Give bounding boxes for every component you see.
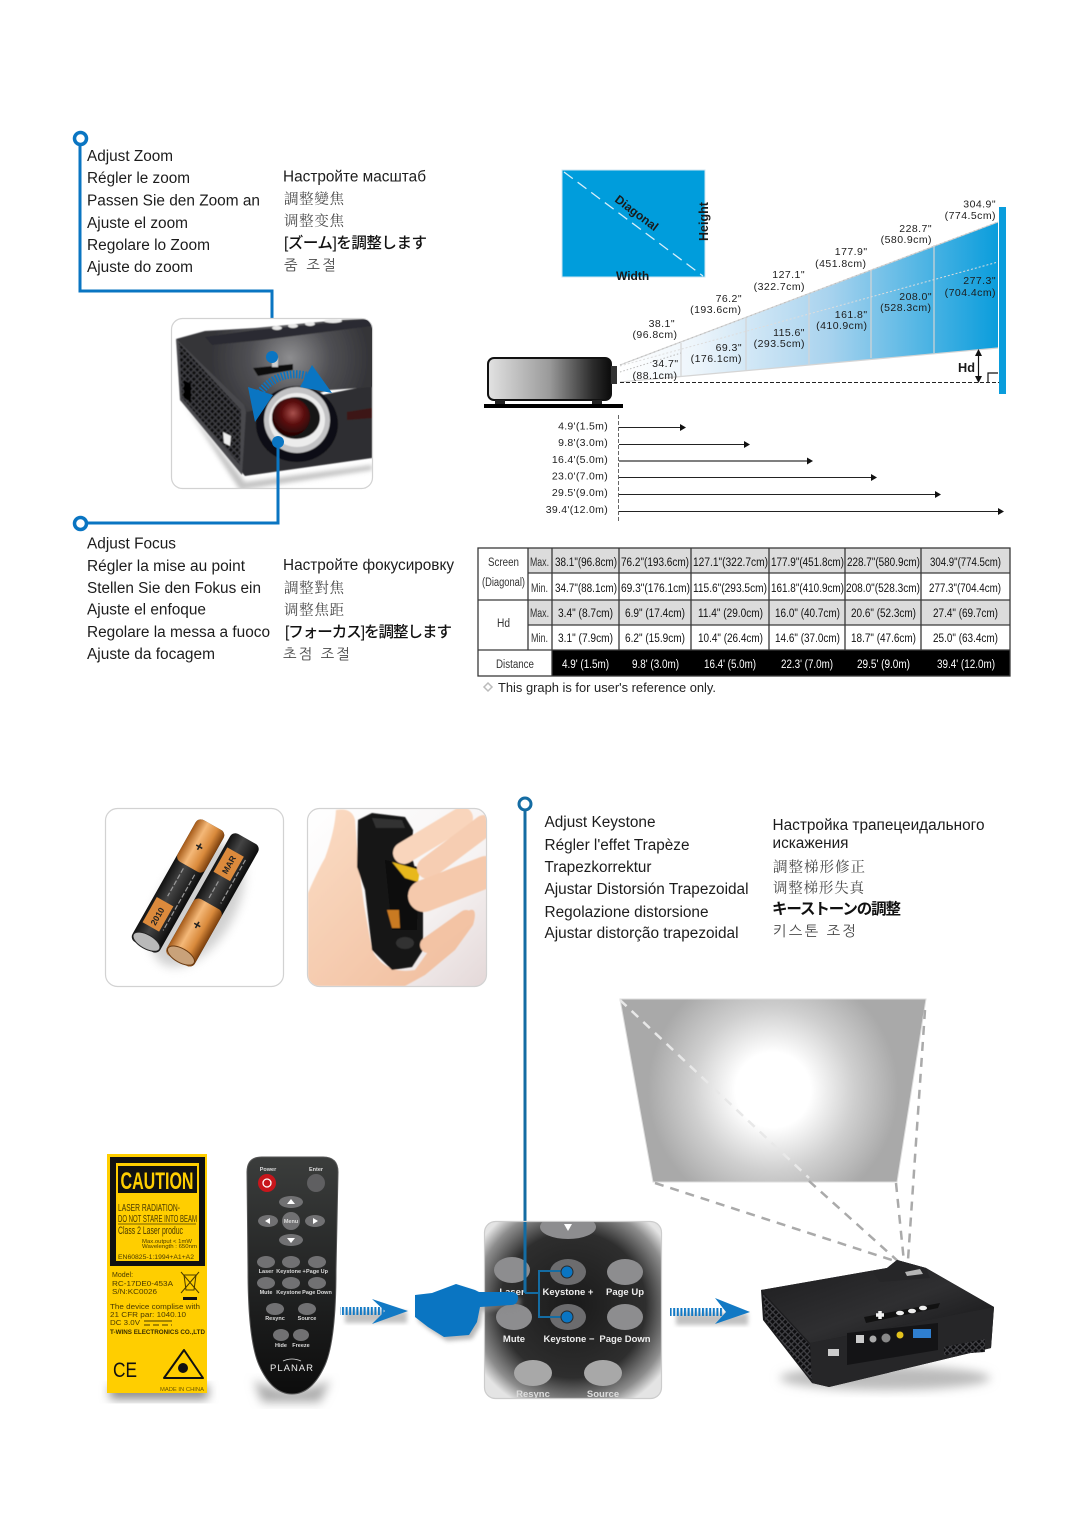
photo: remote control: Resync (265, 1316, 285, 1322)
icon: projector side view (484, 358, 623, 408)
table: projection specifications: Max. (530, 608, 549, 620)
connector: adjust focus (74, 351, 284, 530)
table: projection specifications: 10.4" (26.4cm) (698, 633, 763, 645)
label: caution sticker: S/N:KC0026 (112, 1289, 157, 1296)
table: projection specifications: Max. (530, 557, 549, 569)
labels: beam diagonal sizes: (293.5cm) (754, 338, 805, 350)
battery: back: MAR (220, 854, 238, 876)
labels: beam diagonal sizes: (704.4cm) (945, 287, 996, 299)
text block: adjust focus languages: Ajuste el enfoque (87, 602, 206, 618)
table: projection specifications: 38.1"(96.8cm) (555, 557, 617, 569)
table: projection specifications: (Diagonal) (482, 577, 525, 589)
text block: adjust focus languages: Ajuste da focagem (87, 646, 215, 663)
text block: adjust zoom languages: Adjust Zoom (87, 148, 173, 165)
labels: beam diagonal sizes: 228.7" (899, 223, 932, 235)
photo: remote control (247, 1157, 338, 1402)
table: projection specifications: 3.4" (8.7cm) (558, 608, 613, 620)
label: caution sticker: 21 CFR par: 1040.10 (110, 1312, 186, 1319)
diagram: screen dimensions: Height (697, 201, 711, 241)
labels: beam diagonal sizes: (451.8cm) (815, 258, 866, 270)
icon: rotation arrows (248, 365, 332, 422)
text block: adjust keystone languages: 키스톤 조정 (773, 924, 856, 939)
diagram: screen dimensions: Width (616, 269, 649, 283)
keystone button callout (525, 1222, 573, 1323)
labels: beam diagonal sizes: (88.1cm) (632, 370, 678, 382)
photo: remote control: PLANAR (270, 1363, 314, 1374)
screen bar (999, 207, 1006, 394)
Hd marker: Hd (958, 360, 975, 375)
table: projection specifications: 277.3"(704.4cm) (929, 583, 1001, 595)
table: projection specifications: 39.4' (12.0m) (937, 659, 995, 671)
table: projection specifications: 9.8' (3.0m) (632, 659, 679, 671)
photo: keypad close-up (484, 1215, 662, 1400)
labels: beam diagonal sizes: (580.9cm) (881, 234, 932, 246)
text block: adjust keystone languages: Ajustar Distorsión Trapezoidal (544, 881, 748, 898)
photo: remote control: Laser (259, 1269, 274, 1275)
table: projection specifications: Hd (497, 618, 510, 630)
photo: remote control: Enter (309, 1167, 324, 1173)
label: caution sticker: MADE IN CHINA (160, 1387, 204, 1393)
labels: beam diagonal sizes: (774.5cm) (945, 210, 996, 222)
table: projection specifications: 16.4' (5.0m) (704, 659, 756, 671)
photo: remote control: Page Up (306, 1269, 329, 1275)
chart: throw distance arrows: 39.4'(12.0m) (546, 504, 608, 516)
label: caution sticker: DC 3.0V (110, 1320, 140, 1327)
table: projection specifications: 25.0" (63.4cm) (933, 633, 998, 645)
text block: adjust zoom languages: 줌 조절 (284, 257, 336, 273)
label: caution sticker: CAUTION (120, 1168, 194, 1195)
text block: adjust zoom languages: 調整變焦 (284, 188, 344, 209)
table: projection specifications: 34.7"(88.1cm) (555, 583, 617, 595)
label: caution sticker: Wavelength : 650nm (142, 1244, 197, 1250)
labels: beam diagonal sizes: 177.9" (835, 246, 868, 258)
photo: keypad close-up: Keystone − (544, 1334, 595, 1345)
table: projection specifications: 127.1"(322.7cm) (693, 557, 768, 569)
table: projection specifications: 27.4" (69.7cm) (933, 608, 998, 620)
labels: beam diagonal sizes: 38.1" (649, 318, 675, 330)
chart: throw distance arrows: 16.4'(5.0m) (552, 454, 608, 466)
text block: adjust zoom languages: Passen Sie den Zoom an (87, 192, 260, 210)
diagram: projection beam (620, 222, 998, 382)
text block: adjust focus languages: Stellen Sie den Fokus ein (87, 580, 261, 597)
arrow: remote to keypad (340, 1299, 408, 1324)
table: projection specifications: 208.0"(528.3cm) (846, 583, 920, 595)
icon: pointing hand (415, 1284, 521, 1341)
icon: laser warning (164, 1350, 203, 1378)
table: projection specifications: 228.7"(580.9cm) (847, 557, 920, 569)
photo: remote control: Hide (275, 1343, 287, 1349)
photo: projector rear view (761, 1260, 994, 1390)
labels: beam diagonal sizes: (322.7cm) (754, 281, 805, 293)
battery: front: + (192, 837, 207, 855)
photo: remote control: Source (298, 1316, 316, 1322)
note: reference only: This graph is for user's reference only. (498, 681, 716, 695)
text block: adjust focus languages: Настройте фокусировку (283, 557, 454, 574)
table: projection specifications: 6.2" (15.9cm) (625, 633, 685, 645)
text block: adjust keystone languages: Régler l'effet Trapèze (544, 837, 690, 854)
arrow: keypad to projector (670, 1298, 750, 1325)
table: projection specifications: 161.8"(410.9cm) (771, 583, 844, 595)
table: projection specifications: 11.4" (29.0cm) (698, 608, 763, 620)
photo: batteries (106, 808, 284, 986)
labels: beam diagonal sizes: 69.3" (716, 342, 742, 354)
text block: adjust keystone languages: Adjust Keystone (544, 814, 656, 831)
labels: beam diagonal sizes: 127.1" (772, 269, 805, 281)
text block: adjust zoom languages: Régler le zoom (87, 170, 190, 187)
battery: front: 2010 (148, 905, 167, 927)
photo: keypad close-up: Resync (516, 1389, 550, 1400)
table: projection specifications (478, 548, 1010, 676)
table: projection specifications: Min. (531, 583, 548, 595)
battery: back: + (190, 916, 205, 934)
text block: adjust keystone languages: Regolazione distorsione (544, 904, 708, 921)
text block: adjust keystone languages: 調整梯形修正 (773, 856, 865, 877)
table: projection specifications: 22.3' (7.0m) (781, 659, 833, 671)
table: projection specifications: 20.6" (52.3cm) (851, 608, 916, 620)
photo: keypad close-up: Page Down (599, 1334, 651, 1345)
text block: adjust zoom languages: Ajuste do zoom (87, 259, 193, 276)
diagram: screen dimensions: Diagonal (612, 192, 661, 234)
labels: beam diagonal sizes: 277.3" (963, 275, 996, 287)
table: projection specifications: 76.2"(193.6cm) (621, 557, 689, 569)
text block: adjust keystone languages: 调整梯形失真 (773, 877, 864, 898)
labels: beam diagonal sizes (632, 198, 996, 382)
label: caution sticker: LASER RADIATION- (118, 1203, 180, 1214)
labels: beam diagonal sizes: 76.2" (716, 293, 742, 305)
labels: beam diagonal sizes: (193.6cm) (690, 304, 742, 316)
label: caution sticker: RC-17DE0-453A (112, 1281, 173, 1288)
photo: remote control: Freeze (292, 1343, 310, 1349)
icon: recycling bin (181, 1272, 199, 1300)
label: caution sticker: CE (113, 1359, 137, 1382)
text block: adjust keystone languages: Настройка трапецеидального (772, 817, 984, 834)
text block: adjust focus languages: 초점 조절 (283, 646, 350, 662)
chart: throw distance arrows: 4.9'(1.5m) (558, 420, 608, 432)
label: caution sticker: DO NOT STARE INTO BEAM (118, 1214, 197, 1225)
table: projection specifications: 177.9"(451.8cm) (771, 557, 844, 569)
table: projection specifications: 115.6"(293.5cm) (693, 583, 767, 595)
photo: keypad close-up: Mute (503, 1334, 525, 1345)
photo: keypad close-up: Page Up (606, 1287, 644, 1298)
text block: adjust focus languages: [フォーカス]を調整します (285, 623, 452, 641)
text block: adjust focus languages (87, 536, 454, 663)
table: projection specifications: 304.9"(774.5cm) (930, 557, 1001, 569)
photo: keypad close-up: Keystone + (543, 1287, 594, 1298)
diagram: keystone trapezoid screen (620, 999, 926, 1263)
label: caution sticker: T-WINS ELECTRONICS CO.,LTD (110, 1329, 205, 1336)
chart: throw distance arrows: 23.0'(7.0m) (552, 470, 608, 482)
table: projection specifications: 29.5' (9.0m) (857, 659, 910, 671)
connector: adjust zoom (74, 132, 272, 356)
photo: remote control: Keystone − (276, 1290, 306, 1296)
text block: adjust zoom languages: Ajuste el zoom (87, 215, 188, 232)
text block: adjust zoom languages (87, 148, 427, 276)
photo: inserting batteries in remote (308, 808, 486, 986)
table: projection specifications: Screen (488, 557, 519, 569)
text block: adjust keystone languages: искажения (772, 835, 848, 852)
table: projection specifications: 6.9" (17.4cm) (625, 608, 685, 620)
photo: remote control: Menu (284, 1219, 298, 1225)
battery: back (164, 831, 261, 970)
photo: projector lens close-up (172, 318, 373, 490)
labels: beam diagonal sizes: 304.9" (963, 198, 996, 210)
chart: throw distance arrows: 9.8'(3.0m) (558, 437, 608, 449)
labels: beam diagonal sizes: (176.1cm) (691, 353, 742, 365)
text block: adjust keystone languages: Trapezkorrektur (544, 859, 652, 876)
photo: keypad close-up: Source (587, 1389, 619, 1400)
label: caution sticker: EN60825-1:1994+A1+A2 (118, 1254, 194, 1261)
label: caution sticker: The device complise with (110, 1304, 200, 1311)
connector: adjust keystone (519, 798, 531, 1222)
chart: throw distance arrows (546, 415, 1004, 522)
photo: keypad close-up: Laser (499, 1287, 525, 1298)
diagram: screen dimensions (562, 170, 711, 283)
label: caution sticker: Max.output < 1mW (142, 1239, 193, 1245)
chart: throw distance arrows: 29.5'(9.0m) (552, 487, 608, 499)
text block: adjust keystone languages (544, 814, 984, 942)
text block: adjust keystone languages: キーストーンの調整 (772, 900, 901, 918)
photo: remote control: Mute (260, 1290, 272, 1296)
text block: adjust focus languages: Adjust Focus (87, 536, 176, 552)
table: projection specifications: 14.6" (37.0cm) (775, 633, 840, 645)
labels: beam diagonal sizes: 208.0" (899, 291, 932, 303)
text block: adjust zoom languages: Настройте масштаб (283, 168, 426, 186)
table: projection specifications: 16.0" (40.7cm) (775, 608, 840, 620)
table: projection specifications: 3.1" (7.9cm) (558, 633, 613, 645)
table: projection specifications: Distance (496, 659, 534, 671)
text block: adjust keystone languages: Ajustar distorção trapezoidal (544, 925, 738, 942)
labels: beam diagonal sizes: 161.8" (835, 309, 868, 321)
label: caution sticker: Model: (112, 1272, 133, 1279)
photo: remote control: Power (260, 1167, 277, 1173)
table: projection specifications: Min. (531, 633, 548, 645)
photo: remote control: Page Down (302, 1290, 332, 1296)
table: projection specifications: 69.3"(176.1cm) (621, 583, 690, 595)
battery: front (129, 817, 226, 956)
text block: adjust zoom languages: 调整变焦 (284, 210, 344, 231)
text block: adjust zoom languages: Regolare lo Zoom (87, 237, 210, 254)
table: projection specifications: 18.7" (47.6cm) (851, 633, 916, 645)
labels: beam diagonal sizes: (96.8cm) (632, 329, 678, 341)
labels: beam diagonal sizes: 34.7" (652, 358, 678, 370)
label: caution sticker (107, 1154, 208, 1399)
text block: adjust zoom languages: [ズーム]を調整します (284, 233, 427, 252)
label: caution sticker: Class 2 Laser produc (118, 1225, 183, 1237)
Hd marker (620, 349, 999, 383)
table: projection specifications: 4.9' (1.5m) (562, 659, 609, 671)
text block: adjust focus languages: 调整焦距 (284, 599, 344, 620)
labels: beam diagonal sizes: (528.3cm) (880, 302, 932, 314)
text block: adjust focus languages: Régler la mise au point (87, 558, 246, 575)
photo: remote control: Keystone + (276, 1269, 306, 1275)
labels: beam diagonal sizes: (410.9cm) (816, 320, 868, 332)
labels: beam diagonal sizes: 115.6" (773, 327, 805, 339)
text block: adjust focus languages: 調整對焦 (284, 577, 344, 598)
text block: adjust focus languages: Regolare la messa a fuoco (87, 624, 270, 641)
